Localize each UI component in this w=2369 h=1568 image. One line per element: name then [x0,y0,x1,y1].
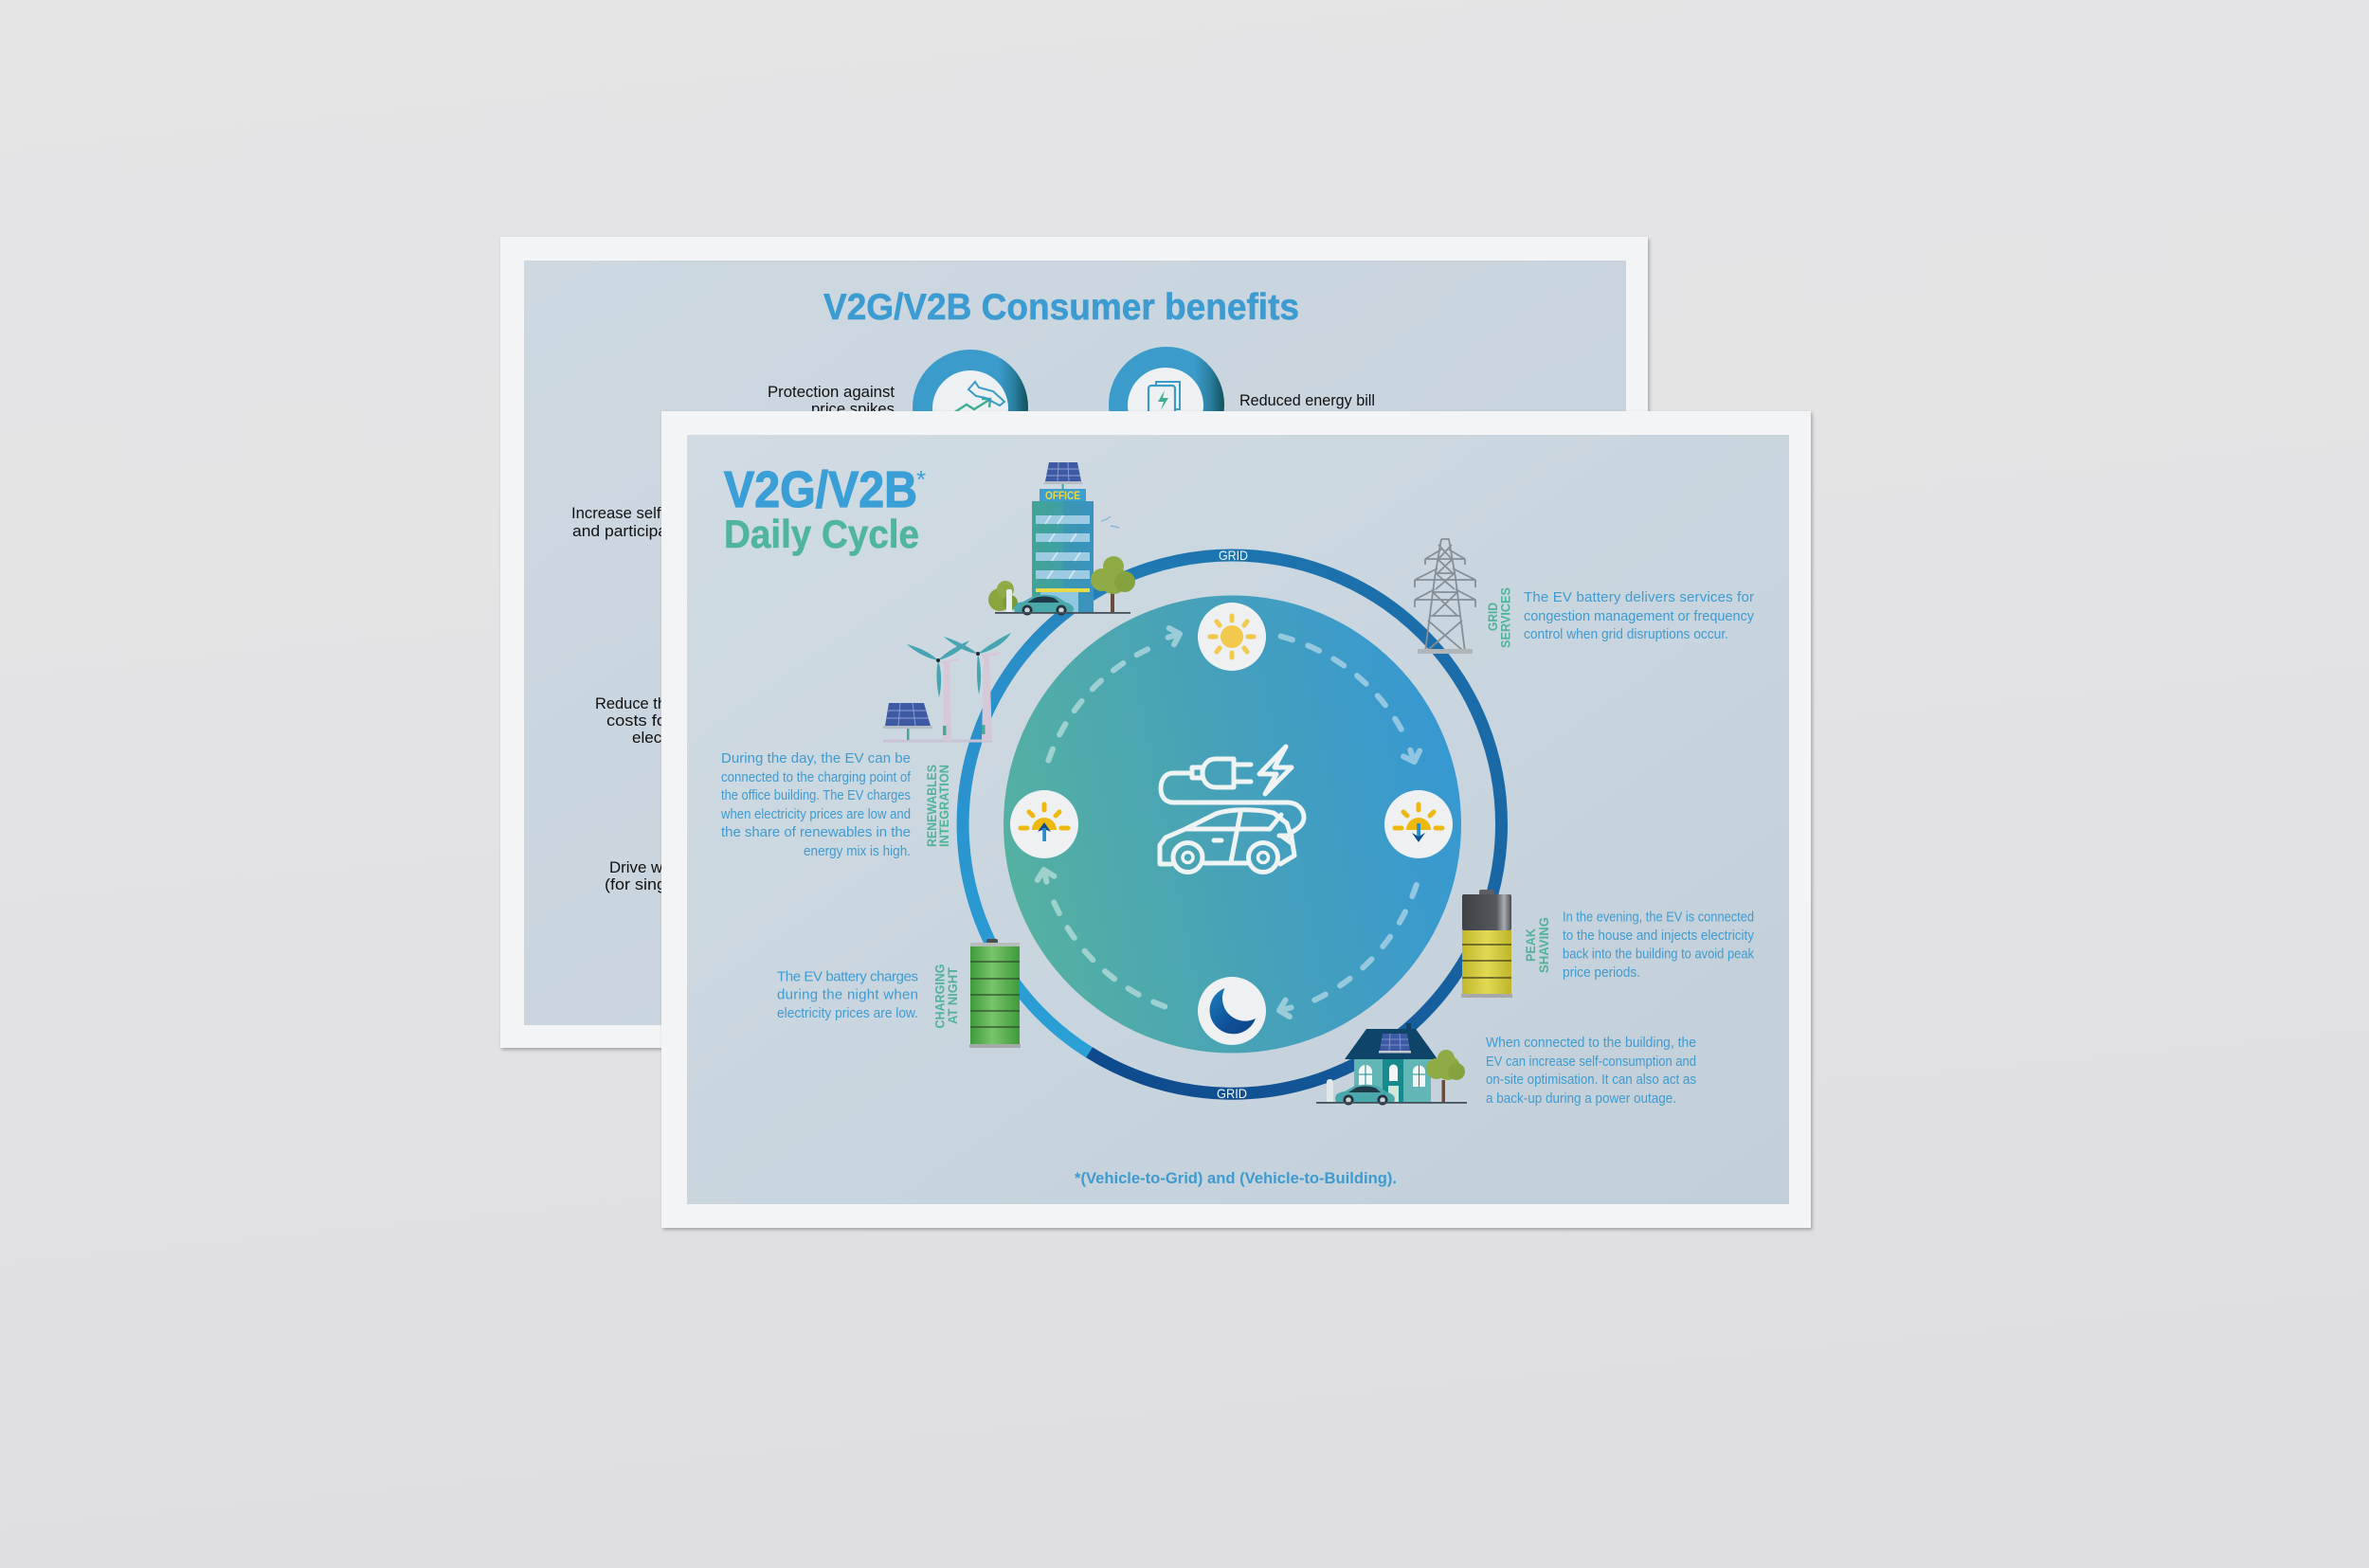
label: charging at night: CHARGING [932,964,948,1029]
text: building description: a back-up during a power outage. [1486,1090,1676,1107]
text: peak shaving description: price periods. [1563,964,1640,981]
text: increase self-consumption: Increase self- [571,504,666,522]
icon: green battery [969,939,1021,1048]
illustration: office building [988,462,1135,616]
label: peak shaving [1524,917,1551,973]
tree at house [1426,1050,1465,1102]
text: renewables description: energy mix is high. [804,843,911,859]
text: protection against price spikes: Protection against [768,383,895,401]
label: renewables integration [925,765,951,847]
text: peak shaving description [1563,910,1754,981]
illustration: wind turbines and solar panel [883,633,1011,743]
label: peak shaving: PEAK [1524,928,1538,962]
text: grid services description: The EV battery delivers services for [1524,589,1754,605]
text: peak shaving description: In the evening, the EV is connected [1563,910,1754,925]
text: charging description: electricity prices are low. [777,1005,918,1021]
icon: reduced energy bill [1109,347,1224,462]
label: grid services [1486,587,1512,648]
label: grid top: GRID [1219,548,1248,563]
text: reduce costs: costs fo [606,712,666,730]
text: charging description: during the night when [777,987,918,1002]
label: grid services: GRID [1486,603,1500,631]
label: grid bottom: GRID [1217,1086,1247,1101]
icon: electric car with plug [1160,747,1304,872]
text: reduced energy bill: Reduced energy bill [1239,391,1375,409]
text: reduce costs [595,694,666,747]
icon: sunrise arrow up [1010,790,1078,858]
label: charging at night [932,964,960,1029]
text: reduce costs: elect [632,729,666,747]
text: grid services description [1524,589,1754,642]
text: protection against price spikes: price spikes [811,400,895,418]
panel: front card, daily cycle [661,411,1811,1228]
dashed cycle path [983,575,1481,1073]
outer grid ring [963,555,1502,1093]
text: building description: When connected to the building, the [1486,1035,1696,1051]
text: charging description [777,968,918,1021]
car at office [1014,595,1074,616]
bush and charger at office [988,581,1018,613]
label: peak shaving: SHAVING [1537,917,1551,973]
text: building description [1486,1035,1696,1107]
text: peak shaving description: back into the building to avoid peak [1563,946,1754,963]
text: drive: Drive wi [609,858,666,876]
text: renewables description: when electricity prices are low and [720,806,911,822]
text: building description: EV can increase self-consumption and [1486,1054,1696,1070]
text: renewables description: During the day, the EV can be [721,750,911,766]
icon: day sun [1198,603,1266,671]
label: grid services: SERVICES [1499,587,1512,648]
text: increase self-consumption: and participa [572,522,668,540]
text: grid services description: congestion management or frequency [1524,608,1754,624]
label: charging at night: AT NIGHT [946,966,960,1024]
text: renewables description: the office building. The EV charges [721,787,911,803]
text: reduce costs: Reduce th [595,694,666,712]
title: V2G/V2B: V2G/V2B [724,461,917,518]
text: drive: (for sing [605,875,666,893]
illustration: transmission tower [1415,539,1475,654]
car at house [1335,1085,1395,1105]
icon: moon [1198,977,1266,1045]
illustration: house with car [1316,1023,1467,1105]
heading: consumer benefits: V2G/V2B Consumer benefits [823,287,1299,328]
label: renewables integration: RENEWABLES [925,765,939,847]
text: renewables description: connected to the charging point of [721,769,912,785]
arrows on cycle path [1036,625,1422,1018]
text: protection against price spikes [768,383,895,418]
title: V2G/V2B: * [916,465,926,494]
text: drive [605,858,666,893]
footnote: *(Vehicle-to-Grid) and (Vehicle-to-Building). [1075,1169,1397,1187]
icon: protection against price spikes [913,350,1028,465]
text: peak shaving description: to the house and injects electricity [1563,928,1754,944]
title: Daily Cycle: Daily Cycle [724,512,919,556]
text: renewables description [720,750,912,859]
charger at house [1327,1079,1333,1103]
icon: sunset arrow down [1384,790,1453,858]
central disc [1004,595,1461,1054]
icon: yellow battery [1461,890,1512,998]
text: grid services description: control when grid disruptions occur. [1524,626,1728,642]
text: charging description: The EV battery charges [777,968,918,985]
text: increase self-consumption [571,504,668,540]
text: renewables description: the share of renewables in the [721,824,911,840]
label: renewables integration: INTEGRATION [937,765,951,847]
tree at office [1091,556,1135,613]
office sign: OFFICE [1045,489,1080,502]
panel: back card, consumer benefits [500,237,1648,1048]
text: building description: on-site optimisation. It can also act as [1486,1072,1696,1088]
